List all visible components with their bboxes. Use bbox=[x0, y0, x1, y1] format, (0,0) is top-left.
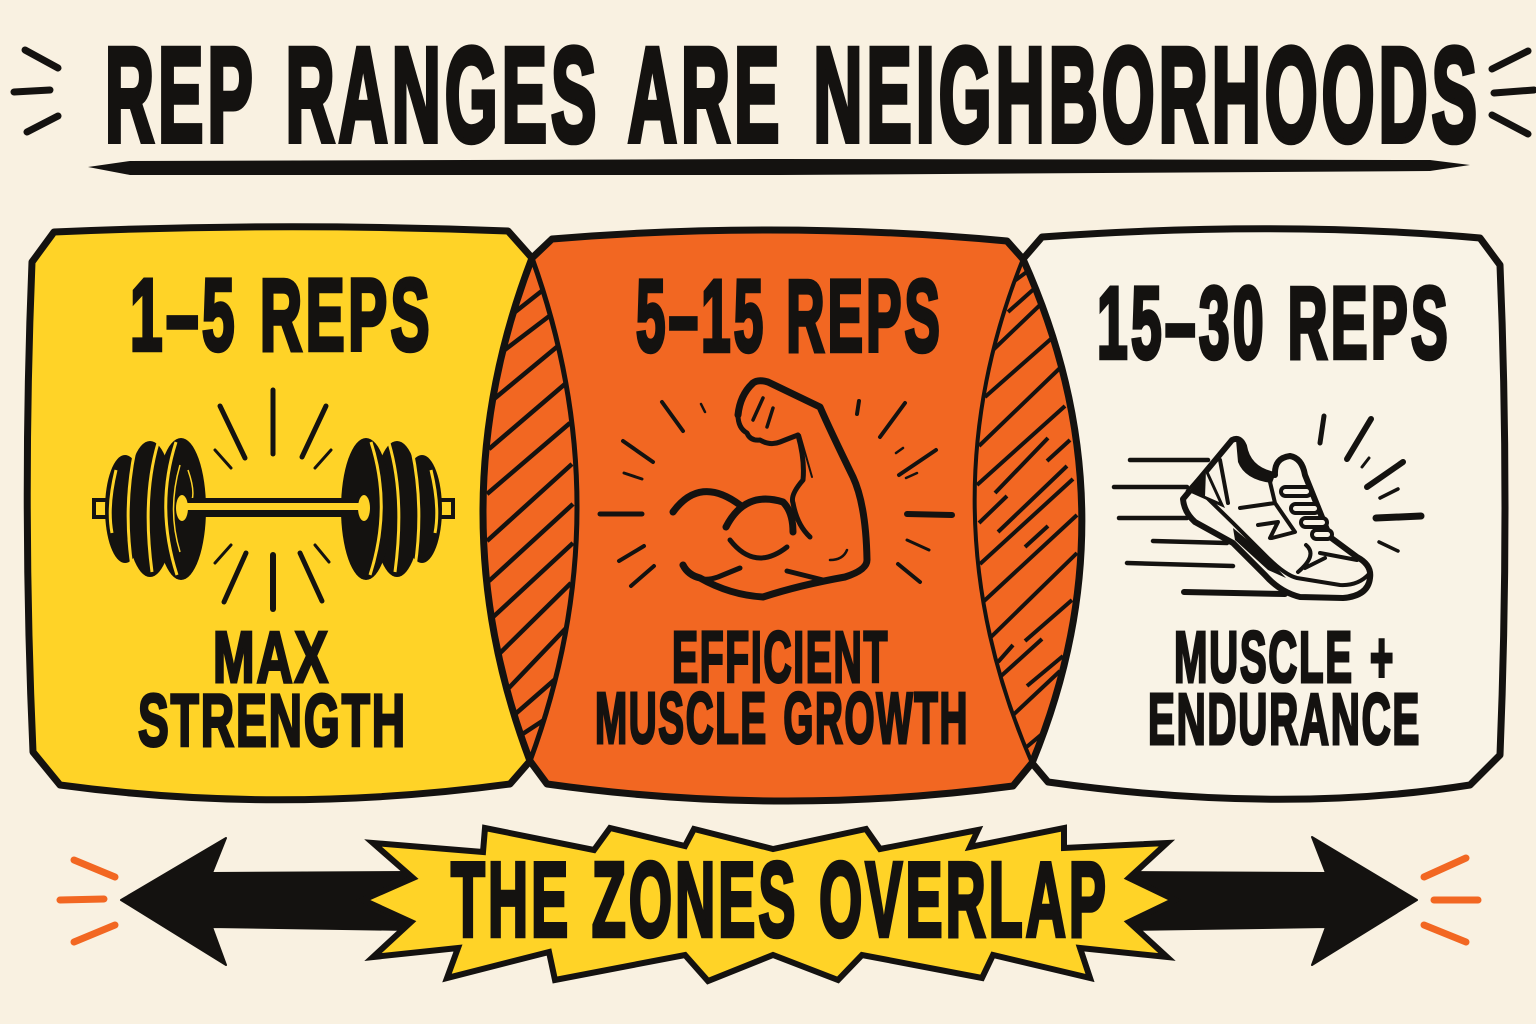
hatch overlap right bbox=[975, 259, 1077, 763]
icon: flexed bicep bbox=[600, 381, 952, 597]
panel background white bbox=[1023, 229, 1505, 799]
left title accent ticks bbox=[14, 50, 58, 132]
label: muscle growth: MUSCLE GROWTH bbox=[595, 679, 969, 759]
label: strength: STRENGTH bbox=[138, 679, 407, 762]
icon: running shoe bbox=[1114, 416, 1421, 598]
starburst shape bbox=[363, 828, 1175, 981]
right title accent ticks bbox=[1492, 51, 1534, 134]
label: max: MAX bbox=[213, 618, 330, 698]
left arrow orange ticks bbox=[60, 860, 115, 942]
panel background yellow bbox=[27, 227, 532, 800]
heading: 1-5 reps: 1–5 REPS bbox=[130, 258, 433, 372]
panel: 1-5 reps bbox=[27, 227, 532, 800]
hatch overlap left bbox=[487, 258, 577, 761]
icon: barbell bbox=[94, 390, 453, 609]
right arrow bbox=[1125, 837, 1417, 965]
panel background orange bbox=[483, 230, 1082, 801]
panel: 5-15 reps bbox=[483, 230, 1082, 801]
icon part: right plates bbox=[341, 438, 453, 580]
panel: 15-30 reps bbox=[1023, 229, 1505, 799]
right arrow orange ticks bbox=[1424, 858, 1478, 942]
banner: the zones overlap bbox=[363, 828, 1175, 981]
label: efficient: EFFICIENT bbox=[672, 618, 889, 698]
title underline bbox=[88, 159, 1470, 175]
left arrow bbox=[121, 838, 410, 965]
heading: 5-15 reps: 5–15 REPS bbox=[636, 259, 943, 373]
